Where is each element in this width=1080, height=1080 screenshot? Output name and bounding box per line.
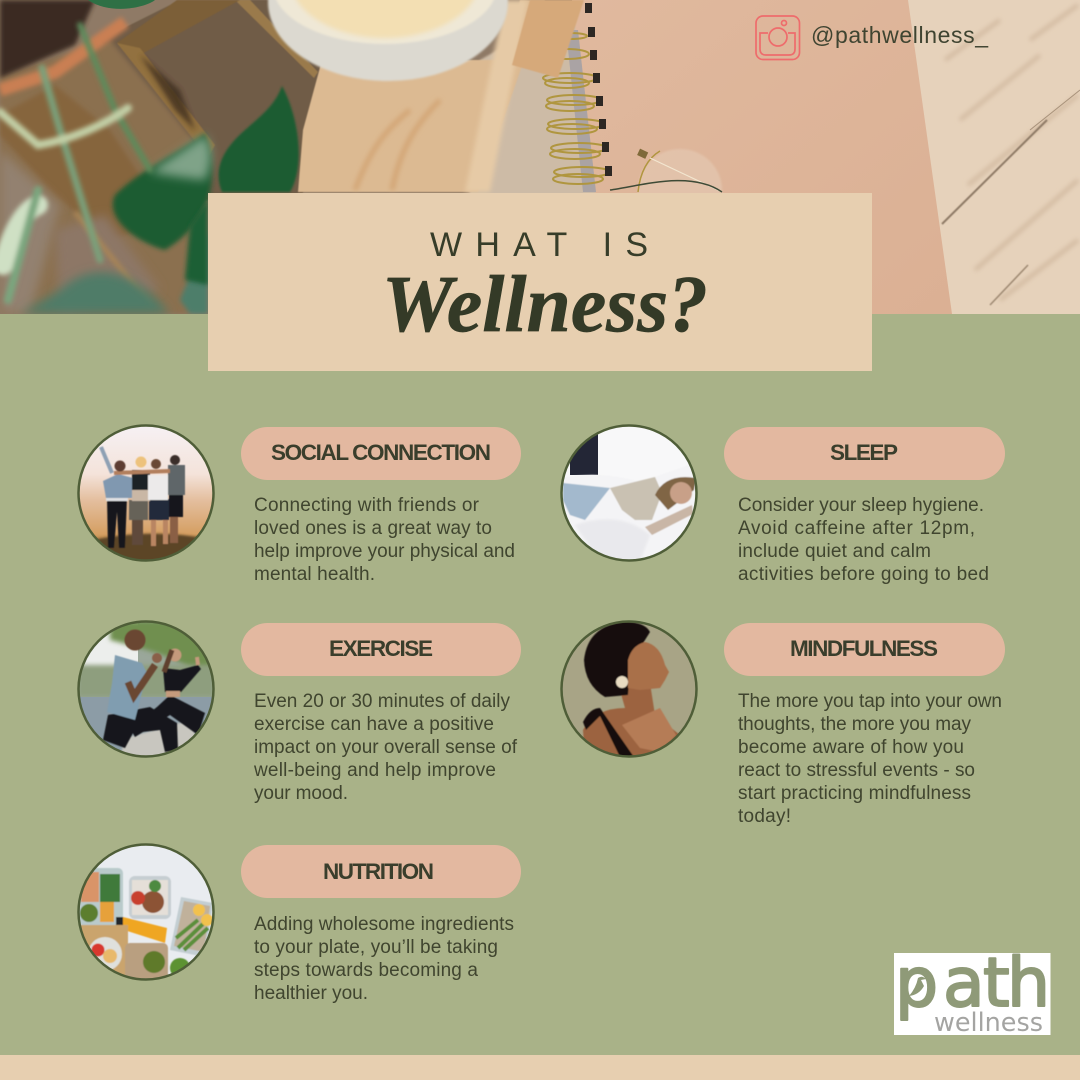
description: activities before going to bed (738, 564, 989, 585)
description: Even 20 or 30 minutes of daily (254, 691, 510, 712)
description (254, 914, 514, 1004)
description: become aware of how you (738, 737, 964, 758)
photo ring (562, 426, 696, 560)
section: exercise (78, 621, 521, 804)
photo: woman breathing (561, 621, 697, 760)
title main: Wellness? (382, 261, 708, 349)
description: Avoid caffeine after 12pm, (738, 518, 975, 539)
section: social connection (70, 425, 521, 585)
dark wooden crate (110, 0, 320, 200)
photo ring (78, 426, 214, 560)
title eyebrow: WHAT IS (430, 226, 648, 264)
heading pill: EXERCISE (329, 636, 433, 661)
olive wood board (298, 0, 584, 192)
description (254, 495, 515, 585)
description: react to stressful events - so (738, 760, 975, 781)
photo ring (562, 622, 696, 756)
description: exercise can have a positive (254, 714, 494, 735)
description: your mood. (254, 783, 348, 804)
photo ring (78, 844, 214, 980)
instagram handle: @pathwellness_ (811, 22, 989, 48)
icon: bird (909, 977, 926, 996)
description: to your plate, you’ll be taking (254, 937, 498, 958)
bottom band (0, 1055, 1080, 1080)
heading pill: NUTRITION (323, 859, 434, 884)
spiral binding (543, 3, 612, 192)
notebook (572, 0, 952, 314)
description: steps towards becoming a (254, 960, 478, 981)
section: nutrition (78, 844, 521, 1004)
description: The more you tap into your own (738, 691, 1002, 712)
description (253, 691, 518, 804)
description: impact on your overall sense of (254, 737, 518, 758)
instagram icon (756, 16, 800, 60)
description: help improve your physical and (254, 541, 515, 562)
heading pill (241, 845, 521, 898)
photo: meal prep containers (78, 844, 214, 980)
photo ring (78, 622, 214, 756)
white jar (268, 0, 508, 81)
heading pill (241, 623, 521, 676)
heading pill: MINDFULNESS (790, 636, 938, 661)
description: today! (738, 806, 791, 827)
photo: friends at sunset (80, 426, 212, 560)
header photo: desk flat-lay (0, 0, 1080, 314)
description: thoughts, the more you may (738, 714, 972, 735)
description: mental health. (254, 564, 375, 585)
description (738, 495, 989, 585)
description: Consider your sleep hygiene. (738, 495, 984, 516)
description: well-being and help improve (253, 760, 496, 781)
logo: path wellness: path (895, 944, 1050, 1023)
description: Connecting with friends or (254, 495, 480, 516)
description: start practicing mindfulness (738, 783, 971, 804)
logo: path wellness: wellness (934, 1008, 1043, 1038)
heading pill (724, 427, 1005, 480)
description: loved ones is a great way to (254, 518, 492, 539)
description: include quiet and calm (738, 541, 931, 562)
photo: woman sleeping (561, 425, 697, 561)
light wood table (900, 0, 1080, 314)
section: sleep (561, 425, 1005, 585)
heading pill: SOCIAL CONNECTION (271, 440, 491, 465)
heading pill (724, 623, 1005, 676)
table under notebook (468, 26, 596, 193)
description: healthier you. (254, 983, 368, 1004)
heading pill: SLEEP (830, 440, 898, 465)
blurred green leaves (0, 0, 299, 314)
photo: outdoor lunges (78, 621, 214, 757)
description (738, 691, 1002, 827)
eyeglasses (610, 148, 722, 193)
title panel (208, 193, 872, 371)
section: mindfulness (561, 621, 1005, 827)
description: Adding wholesome ingredients (254, 914, 514, 935)
heading pill (241, 427, 521, 480)
left plant box (0, 0, 210, 314)
